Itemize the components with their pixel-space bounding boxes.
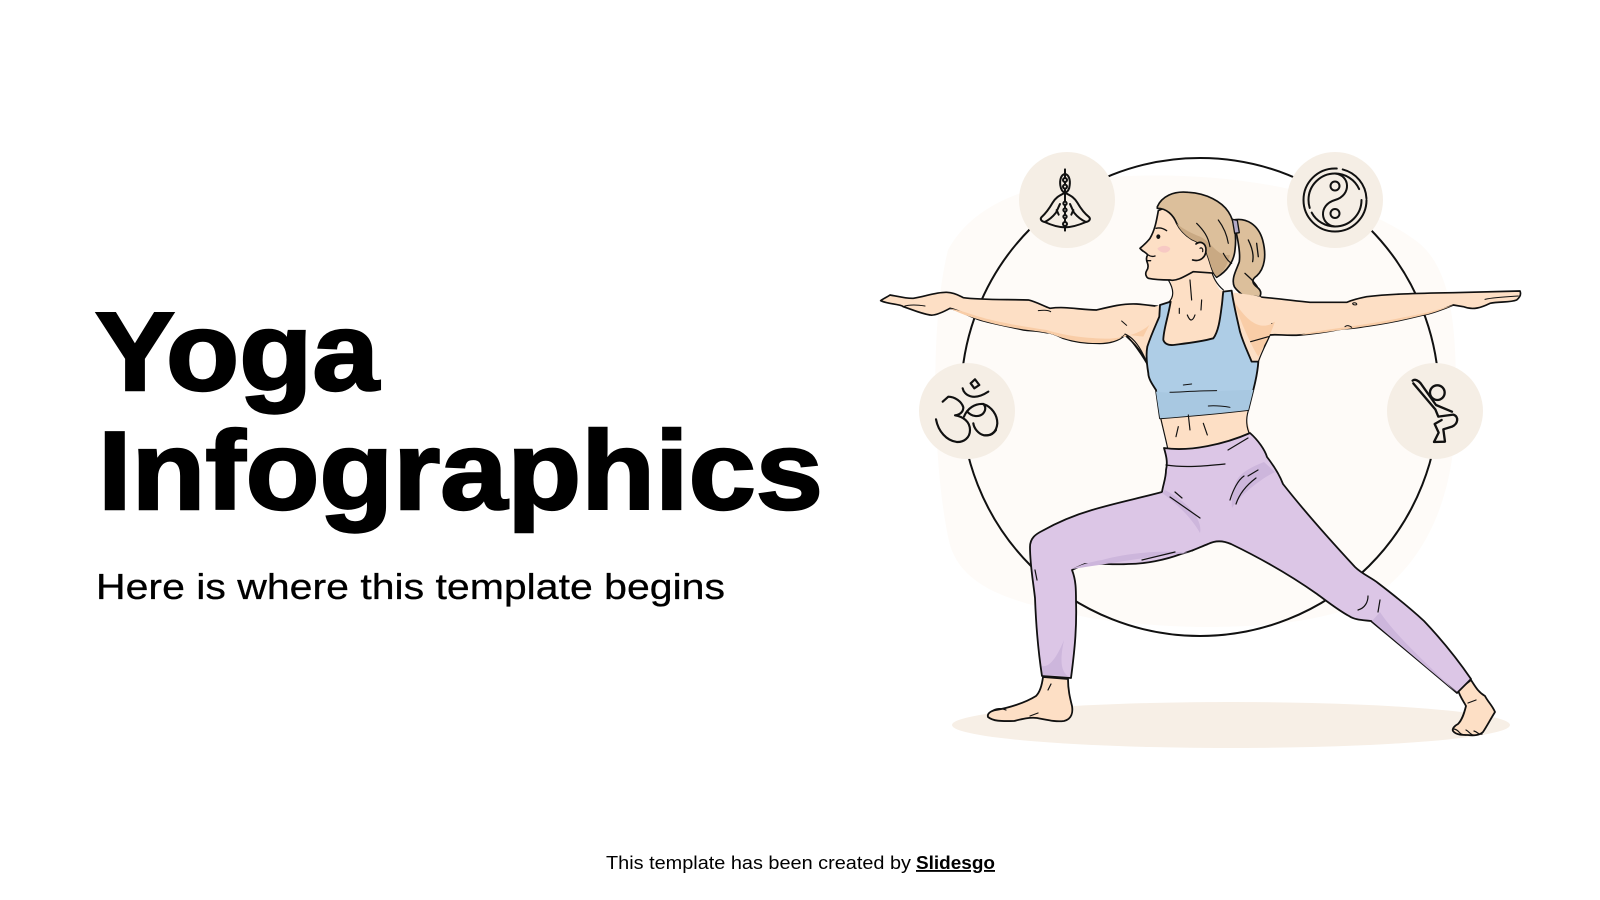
left arm (881, 292, 1167, 373)
leggings (1030, 433, 1471, 693)
left foot (988, 677, 1072, 721)
footer credit: This template has been created by (606, 852, 912, 873)
icon: chair pose figure (1387, 363, 1483, 459)
icon: yin yang (1287, 152, 1383, 248)
title: Infographics (98, 409, 823, 533)
illustration: yoga woman in warrior pose (881, 152, 1521, 748)
right foot (1453, 680, 1495, 735)
subtitle: Here is where this template begins (96, 566, 725, 607)
abdomen lines (1161, 411, 1250, 448)
background blob (935, 175, 1456, 627)
title: Yoga (95, 290, 380, 414)
footer credit: Slidesgo (916, 852, 995, 873)
ring (961, 158, 1439, 636)
torso skin (1127, 267, 1275, 450)
foot details (992, 684, 1482, 735)
title (95, 290, 823, 533)
ponytail (1233, 219, 1265, 304)
icon: meditation chakras (1019, 152, 1115, 248)
ground shadow (952, 702, 1510, 748)
sports top (1147, 291, 1258, 418)
right arm (1227, 291, 1521, 362)
head and hair (1140, 192, 1239, 280)
icon: om symbol (919, 363, 1015, 459)
